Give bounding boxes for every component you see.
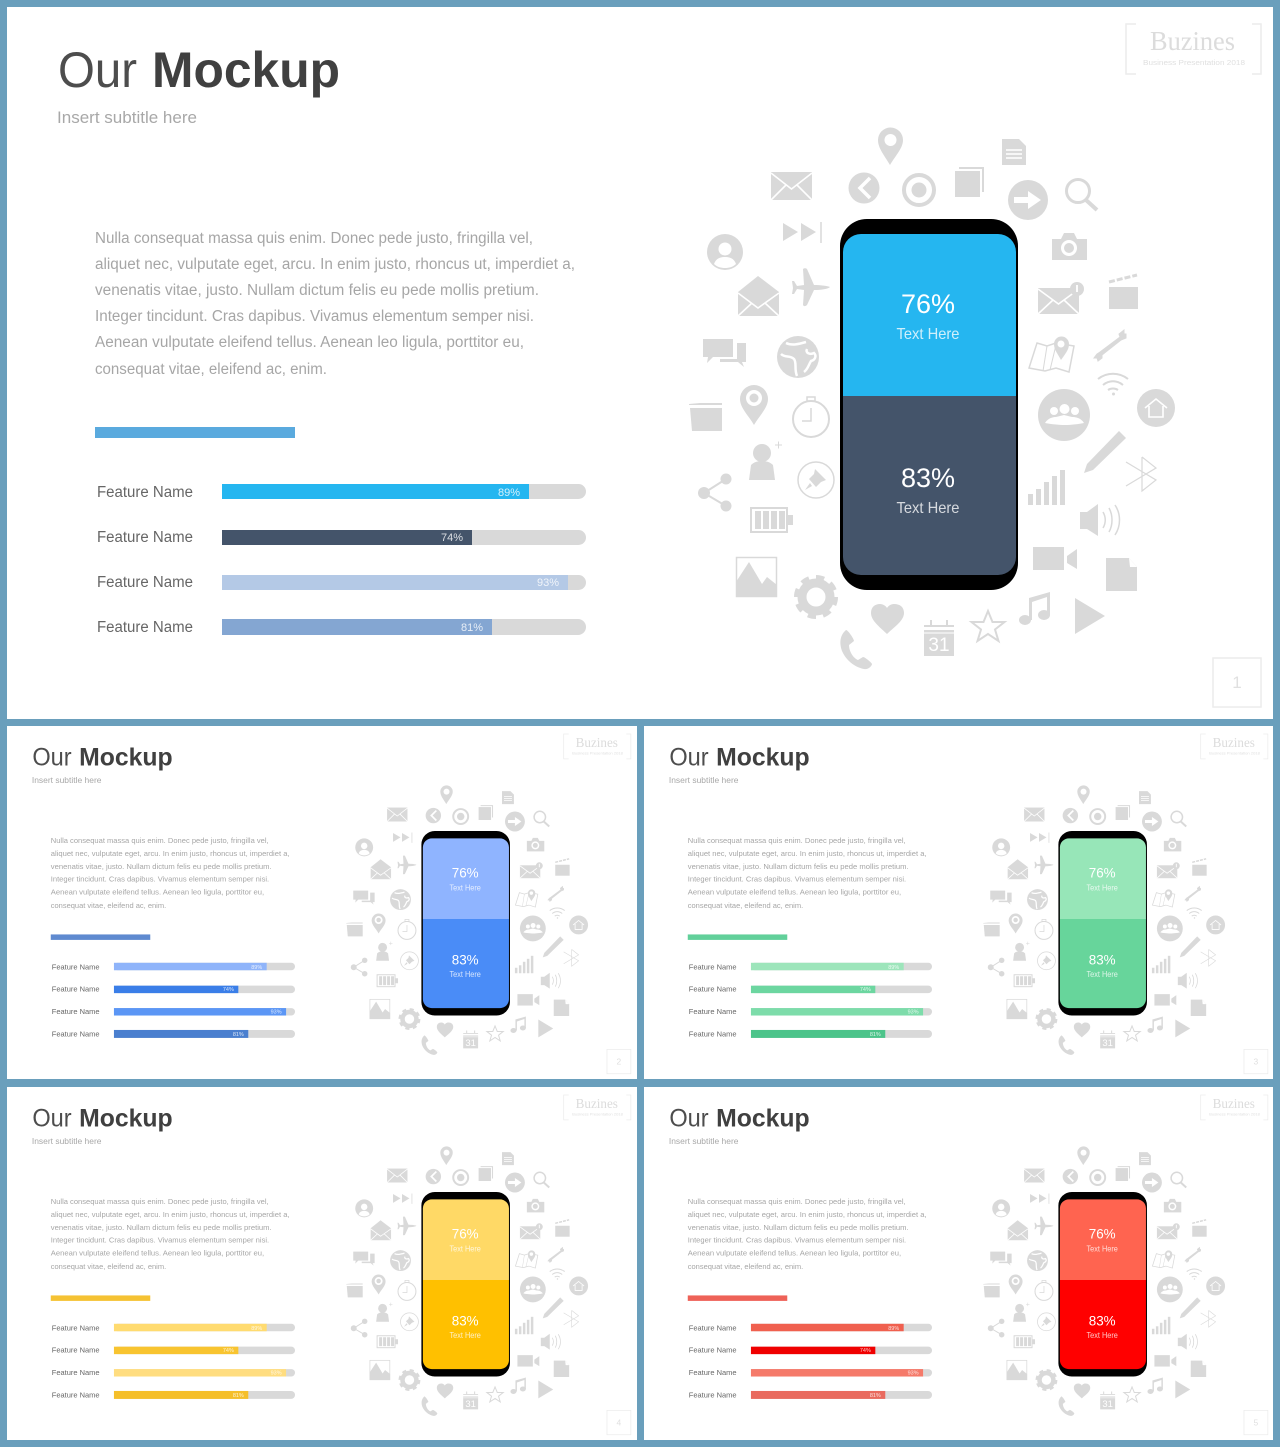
phone stat top: [450, 1227, 481, 1254]
body paragraph: consequat vitae, eleifend ac, enim.: [51, 901, 166, 910]
feature row 89%: [689, 962, 932, 971]
body paragraph: aliquet nec, vulputate eget, arcu. In enim justo, rhoncus ut, imperdiet a,: [51, 849, 290, 858]
icon: video camera: [1033, 547, 1077, 570]
feature row 93%: Feature Name: [689, 1368, 737, 1377]
slide panel: red slide: [644, 1087, 1273, 1440]
body paragraph: Nulla consequat massa quis enim. Donec pede justo, fringilla vel,: [51, 1197, 269, 1206]
icon: wrench: [1094, 330, 1126, 361]
page number: [607, 1410, 631, 1435]
phone stat bottom: 83%: [1089, 952, 1116, 967]
icon: picture: [736, 558, 777, 597]
body paragraph: aliquet nec, vulputate eget, arcu. In enim justo, rhoncus ut, imperdiet a,: [688, 849, 927, 858]
body paragraph: aliquet nec, vulputate eget, arcu. In enim justo, rhoncus ut, imperdiet a,: [95, 256, 575, 273]
feature row 89%: Feature Name: [689, 962, 737, 971]
feature row 93%: 93%: [908, 1010, 919, 1016]
icon: fast forward: [783, 222, 821, 243]
feature row 89%: 89%: [251, 965, 262, 971]
feature row 74%: 74%: [860, 1348, 871, 1354]
phone stat top: 76%: [1089, 1227, 1116, 1242]
subtitle: Insert subtitle here: [57, 108, 197, 127]
calendar date: 31: [1102, 1399, 1113, 1410]
page number: [607, 1049, 631, 1074]
phone stat top: 76%: [901, 289, 955, 319]
feature row 81%: [97, 619, 586, 636]
feature row 74%: [97, 529, 586, 546]
page number: 5: [1254, 1417, 1259, 1427]
icon: folded map with pin: [1029, 336, 1074, 372]
icon: stopwatch: [793, 397, 829, 437]
feature row 74%: Feature Name: [689, 985, 737, 994]
logo: [1201, 1095, 1268, 1120]
calendar date: 31: [928, 635, 950, 656]
body paragraph: Aenean vulputate eleifend tellus. Aenean leo ligula, porttitor eu,: [51, 1249, 264, 1258]
icon: mail with badge: [1038, 282, 1084, 314]
body paragraph: Nulla consequat massa quis enim. Donec pede justo, fringilla vel,: [688, 1197, 906, 1206]
phone stat top: Text Here: [1087, 1245, 1118, 1254]
body paragraph: venenatis vitae, justo. Nullam dictum felis eu pede mollis pretium.: [688, 1223, 909, 1232]
phone stat bottom: [450, 1313, 481, 1340]
feature row 89%: Feature Name: [97, 484, 193, 501]
title: Mockup: [79, 743, 173, 771]
icon: speaker: [1080, 504, 1120, 536]
icon cloud: [983, 785, 1225, 1055]
feature row 93%: 93%: [271, 1371, 282, 1377]
phone mockup: [1058, 1192, 1147, 1377]
slide panel: yellow slide: [7, 1087, 637, 1440]
body paragraph: aliquet nec, vulputate eget, arcu. In enim justo, rhoncus ut, imperdiet a,: [51, 1210, 290, 1219]
slide panel: large cyan slide: [7, 7, 1273, 719]
feature row 74%: Feature Name: [689, 1346, 737, 1355]
icon: pencil: [1084, 431, 1126, 473]
body paragraph: Aenean vulputate eleifend tellus. Aenean leo ligula, porttitor eu,: [51, 888, 264, 897]
feature row 81%: Feature Name: [97, 619, 193, 636]
logo: Business Presentation 2018: [1143, 60, 1245, 67]
feature bars: [689, 962, 932, 1038]
icon: user circle: [707, 234, 743, 270]
phone stat top: Text Here: [1087, 884, 1118, 893]
body paragraph: [688, 1197, 927, 1271]
feature row 89%: 89%: [498, 487, 520, 499]
feature row 93%: 93%: [908, 1371, 919, 1377]
icon: music note: [1019, 592, 1050, 625]
feature row 74%: 74%: [223, 987, 234, 993]
calendar date: 31: [1102, 1038, 1113, 1049]
icon: location pin: [740, 385, 768, 425]
phone stat bottom: Text Here: [450, 970, 481, 979]
phone stat bottom: [450, 952, 481, 979]
body paragraph: Aenean vulputate eleifend tellus. Aenean leo ligula, porttitor eu,: [688, 888, 901, 897]
title: [58, 42, 340, 98]
body paragraph: Nulla consequat massa quis enim. Donec pede justo, fringilla vel,: [688, 836, 906, 845]
icon: home circle: [1137, 389, 1175, 427]
subtitle: Insert subtitle here: [669, 775, 739, 785]
icon cloud: [346, 785, 588, 1055]
feature row 81%: Feature Name: [689, 1029, 737, 1038]
title: Our: [32, 743, 72, 771]
phone stat bottom: 83%: [901, 463, 955, 493]
body paragraph: Integer tincidunt. Cras dapibus. Vivamus elementum semper nisi.: [51, 1236, 269, 1245]
body paragraph: Nulla consequat massa quis enim. Donec pede justo, fringilla vel,: [51, 836, 269, 845]
body paragraph: venenatis vitae, justo. Nullam dictum felis eu pede mollis pretium.: [95, 282, 539, 299]
icon: clapperboard: [1109, 275, 1138, 309]
body paragraph: Integer tincidunt. Cras dapibus. Vivamus elementum semper nisi.: [688, 1236, 906, 1245]
icon: camera: [1052, 233, 1087, 260]
logo: Buzines: [1213, 735, 1255, 750]
feature row 81%: [689, 1390, 932, 1399]
title: [669, 1104, 810, 1132]
feature row 89%: 89%: [251, 1326, 262, 1332]
body paragraph: [688, 836, 927, 910]
logo: Business Presentation 2018: [572, 1112, 623, 1116]
subtitle: Insert subtitle here: [32, 775, 102, 785]
icon: chat bubbles: [703, 339, 746, 367]
title: [669, 743, 810, 771]
phone stat bottom: 83%: [452, 952, 479, 967]
feature row 81%: [689, 1029, 932, 1038]
title: [32, 743, 173, 771]
body paragraph: [51, 1197, 290, 1271]
body paragraph: consequat vitae, eleifend ac, enim.: [688, 901, 803, 910]
body paragraph: Integer tincidunt. Cras dapibus. Vivamus elementum semper nisi.: [95, 308, 534, 325]
phone mockup: [1058, 831, 1147, 1016]
accent bar: [95, 427, 295, 438]
phone stat top: 76%: [1089, 866, 1116, 881]
phone stat bottom: [1087, 952, 1118, 979]
phone stat top: [450, 866, 481, 893]
phone mockup: [421, 1192, 510, 1377]
feature row 81%: 81%: [233, 1032, 244, 1038]
icon: pages: [955, 168, 983, 197]
icon cloud: [689, 128, 1175, 669]
icon: gear: [797, 578, 835, 616]
feature row 81%: [52, 1390, 295, 1399]
feature row 89%: Feature Name: [52, 1323, 100, 1332]
feature row 74%: Feature Name: [52, 985, 100, 994]
page number: 4: [617, 1417, 622, 1427]
phone stat bottom: 83%: [1089, 1313, 1116, 1328]
feature row 93%: 93%: [537, 577, 559, 589]
feature row 74%: [689, 985, 932, 994]
feature row 74%: Feature Name: [97, 529, 193, 546]
phone stat bottom: Text Here: [1087, 1331, 1118, 1340]
page number: [1244, 1049, 1268, 1074]
icon: airplane: [792, 268, 830, 306]
title: Mockup: [79, 1104, 173, 1132]
feature row 89%: 89%: [888, 965, 899, 971]
title: Our: [669, 1104, 709, 1132]
feature row 89%: [689, 1323, 932, 1332]
title: Mockup: [716, 743, 810, 771]
feature row 89%: Feature Name: [52, 962, 100, 971]
icon: add user: [749, 442, 782, 480]
icon: map pin: [878, 128, 903, 165]
title: Our: [58, 42, 137, 98]
title: Mockup: [152, 42, 340, 98]
icon: star: [972, 611, 1004, 641]
icon: heart: [871, 604, 904, 634]
body paragraph: Aenean vulputate eleifend tellus. Aenean leo ligula, porttitor eu,: [95, 334, 524, 351]
feature row 89%: [52, 1323, 295, 1332]
icon: envelope: [771, 172, 812, 200]
feature row 93%: Feature Name: [52, 1007, 100, 1016]
feature row 93%: Feature Name: [689, 1007, 737, 1016]
accent bar: [51, 934, 150, 940]
body paragraph: [51, 836, 290, 910]
icon cloud: [346, 1146, 588, 1416]
feature row 81%: 81%: [870, 1032, 881, 1038]
subtitle: Insert subtitle here: [32, 1136, 102, 1146]
logo: Business Presentation 2018: [1209, 751, 1260, 755]
subtitle: Insert subtitle here: [669, 1136, 739, 1146]
page number: 3: [1254, 1056, 1259, 1066]
body paragraph: venenatis vitae, justo. Nullam dictum felis eu pede mollis pretium.: [688, 862, 909, 871]
icon: share: [698, 474, 732, 512]
phone stat top: 76%: [452, 866, 479, 881]
feature row 74%: [52, 1346, 295, 1355]
feature bars: [52, 962, 295, 1038]
feature row 81%: 81%: [233, 1393, 244, 1399]
logo: [564, 1095, 631, 1120]
phone stat top: Text Here: [450, 884, 481, 893]
icon: telephone: [840, 630, 872, 669]
logo: [1126, 24, 1261, 74]
icon: globe: [777, 336, 819, 378]
feature row 93%: [97, 574, 586, 591]
phone stat bottom: Text Here: [1087, 970, 1118, 979]
slide panel: blue slide: [7, 726, 637, 1079]
page number: 1: [1232, 673, 1242, 692]
body paragraph: venenatis vitae, justo. Nullam dictum felis eu pede mollis pretium.: [51, 862, 272, 871]
logo: Buzines: [576, 1096, 618, 1111]
icon: play: [1075, 598, 1105, 634]
body paragraph: consequat vitae, eleifend ac, enim.: [95, 361, 327, 378]
phone mockup: [421, 831, 510, 1016]
feature row 93%: Feature Name: [97, 574, 193, 591]
feature bars: [689, 1323, 932, 1399]
icon: document: [1002, 139, 1026, 165]
feature row 74%: 74%: [223, 1348, 234, 1354]
feature row 89%: [52, 962, 295, 971]
icon: back circle: [848, 172, 880, 204]
body paragraph: venenatis vitae, justo. Nullam dictum felis eu pede mollis pretium.: [51, 1223, 272, 1232]
icon: group circle: [1038, 389, 1090, 441]
feature row 74%: 74%: [860, 987, 871, 993]
title: Our: [669, 743, 709, 771]
body paragraph: Integer tincidunt. Cras dapibus. Vivamus elementum semper nisi.: [51, 875, 269, 884]
phone stat top: Text Here: [896, 326, 960, 343]
logo: [564, 734, 631, 759]
feature row 74%: Feature Name: [52, 1346, 100, 1355]
icon: search: [1066, 180, 1097, 210]
feature row 93%: [52, 1368, 295, 1377]
accent bar: [51, 1295, 150, 1301]
feature row 81%: Feature Name: [689, 1390, 737, 1399]
body paragraph: consequat vitae, eleifend ac, enim.: [51, 1262, 166, 1271]
accent bar: [688, 934, 787, 940]
title: [32, 1104, 173, 1132]
phone stat bottom: 83%: [452, 1313, 479, 1328]
feature row 81%: Feature Name: [52, 1029, 100, 1038]
icon: pushpin circle: [798, 462, 834, 498]
feature row 93%: [52, 1007, 295, 1016]
icon: battery: [751, 508, 793, 532]
icon: open envelope: [738, 276, 779, 316]
page number: 2: [617, 1056, 622, 1066]
feature row 93%: 93%: [271, 1010, 282, 1016]
feature row 93%: [689, 1368, 932, 1377]
feature row 74%: 74%: [441, 532, 463, 544]
feature bars: [52, 1323, 295, 1399]
calendar date: 31: [465, 1399, 476, 1410]
body paragraph: Nulla consequat massa quis enim. Donec pede justo, fringilla vel,: [95, 230, 533, 247]
icon: wifi: [1098, 374, 1128, 396]
phone mockup: [840, 219, 1018, 590]
body paragraph: aliquet nec, vulputate eget, arcu. In enim justo, rhoncus ut, imperdiet a,: [688, 1210, 927, 1219]
phone stat bottom: Text Here: [450, 1331, 481, 1340]
slide panel: green slide: [644, 726, 1273, 1079]
feature row 89%: Feature Name: [689, 1323, 737, 1332]
logo: Buzines: [576, 735, 618, 750]
icon cloud: [983, 1146, 1225, 1416]
title: Mockup: [716, 1104, 810, 1132]
phone stat top: Text Here: [450, 1245, 481, 1254]
feature row 74%: [689, 1346, 932, 1355]
feature row 81%: 81%: [870, 1393, 881, 1399]
feature row 74%: [52, 985, 295, 994]
icon: arrow circle: [1008, 180, 1048, 220]
feature row 89%: [97, 484, 586, 501]
feature bars: [97, 484, 586, 636]
feature row 93%: [689, 1007, 932, 1016]
logo: Buzines: [1150, 26, 1235, 56]
logo: Buzines: [1213, 1096, 1255, 1111]
icon: signal bars: [1028, 470, 1065, 505]
title: Our: [32, 1104, 72, 1132]
phone stat top: [896, 289, 960, 343]
feature row 81%: Feature Name: [52, 1390, 100, 1399]
accent bar: [688, 1295, 787, 1301]
icon: folder: [689, 403, 722, 431]
logo: [1201, 734, 1268, 759]
icon: bluetooth: [1126, 457, 1156, 491]
logo: Business Presentation 2018: [1209, 1112, 1260, 1116]
logo: Business Presentation 2018: [572, 751, 623, 755]
feature row 89%: 89%: [888, 1326, 899, 1332]
icon: target: [904, 175, 934, 205]
body paragraph: consequat vitae, eleifend ac, enim.: [688, 1262, 803, 1271]
feature row 81%: 81%: [461, 622, 483, 634]
body paragraph: Aenean vulputate eleifend tellus. Aenean leo ligula, porttitor eu,: [688, 1249, 901, 1258]
phone stat top: 76%: [452, 1227, 479, 1242]
page number: [1244, 1410, 1268, 1435]
body paragraph: Integer tincidunt. Cras dapibus. Vivamus elementum semper nisi.: [688, 875, 906, 884]
feature row 93%: Feature Name: [52, 1368, 100, 1377]
icon: file: [1106, 558, 1137, 591]
phone stat top: [1087, 866, 1118, 893]
calendar date: 31: [465, 1038, 476, 1049]
phone stat bottom: [1087, 1313, 1118, 1340]
feature row 81%: [52, 1029, 295, 1038]
page number: [1213, 658, 1261, 707]
body paragraph: [95, 230, 575, 378]
phone stat bottom: Text Here: [896, 500, 960, 517]
icon: calendar: [924, 620, 954, 656]
phone stat top: [1087, 1227, 1118, 1254]
phone stat bottom: [896, 463, 960, 517]
